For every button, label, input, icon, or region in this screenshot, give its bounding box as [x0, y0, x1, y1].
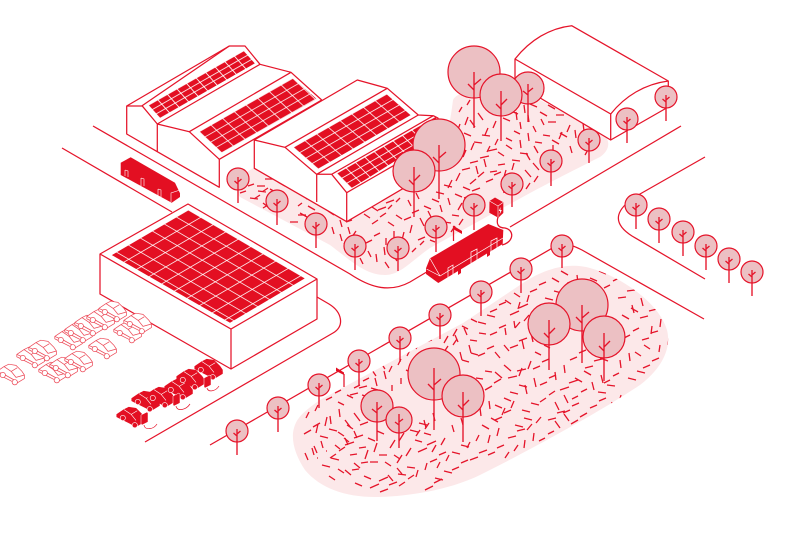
tree: [470, 281, 492, 316]
tree: [648, 208, 670, 243]
electric cars charging: [117, 359, 222, 429]
tree: [393, 150, 435, 217]
tree: [616, 108, 638, 143]
solar panels: hall 3: [293, 94, 411, 169]
tree: [551, 235, 573, 268]
tree: [227, 168, 249, 203]
tree: [741, 261, 763, 296]
building: flat warehouse: [100, 204, 317, 369]
tree: [528, 303, 570, 370]
tree: [512, 72, 544, 122]
tree: [267, 397, 289, 432]
tree: [540, 150, 562, 186]
tree: [655, 86, 677, 121]
tree: [429, 304, 451, 339]
tree: [448, 46, 500, 128]
solar panels: hall 2: [199, 78, 317, 153]
large electric bus: [426, 224, 503, 283]
building: saw-tooth hall 2: [254, 80, 438, 222]
tree: [348, 350, 370, 385]
ground dashes: lower area: [304, 271, 669, 492]
tree: [718, 248, 740, 283]
lower green area: [293, 266, 668, 497]
tree: [344, 235, 366, 270]
solar panels: hall 4: [337, 116, 438, 188]
tree: [408, 348, 460, 430]
tree: [501, 173, 523, 207]
small electric bus: [121, 157, 180, 203]
tree: [463, 194, 485, 230]
parked cars: [0, 301, 151, 385]
tree: [672, 221, 694, 256]
trees: lower row and park: [226, 235, 625, 455]
tree: [386, 407, 412, 448]
tree: [625, 194, 647, 229]
charging station: [489, 198, 503, 218]
tree: [556, 279, 608, 363]
upper green area: [237, 89, 608, 275]
tree: [510, 258, 532, 293]
ground dashes: upper area: [240, 97, 597, 268]
tree: [266, 190, 288, 225]
charging station cable: [497, 217, 512, 245]
tree: [361, 390, 393, 441]
tree: [389, 327, 411, 362]
solar panels: hall 1: [148, 51, 255, 118]
tree: [425, 216, 447, 252]
building: saw-tooth hall 1: [127, 46, 322, 187]
tree: [480, 74, 522, 141]
solar panels: warehouse: [112, 210, 305, 323]
tree: [578, 129, 600, 163]
tree: [226, 420, 248, 455]
trees: right row: [625, 194, 763, 296]
tree: [305, 213, 327, 248]
sign: bus stop: [453, 226, 462, 241]
tree: [583, 316, 625, 381]
tree: [387, 237, 409, 271]
sign: road side: [336, 368, 344, 387]
trees: upper row: [227, 46, 677, 271]
tree: [695, 235, 717, 270]
tree: [308, 374, 330, 408]
roads: [62, 126, 705, 445]
tree: [442, 375, 484, 442]
tree: [413, 119, 465, 199]
building: arched hall: [515, 26, 668, 140]
